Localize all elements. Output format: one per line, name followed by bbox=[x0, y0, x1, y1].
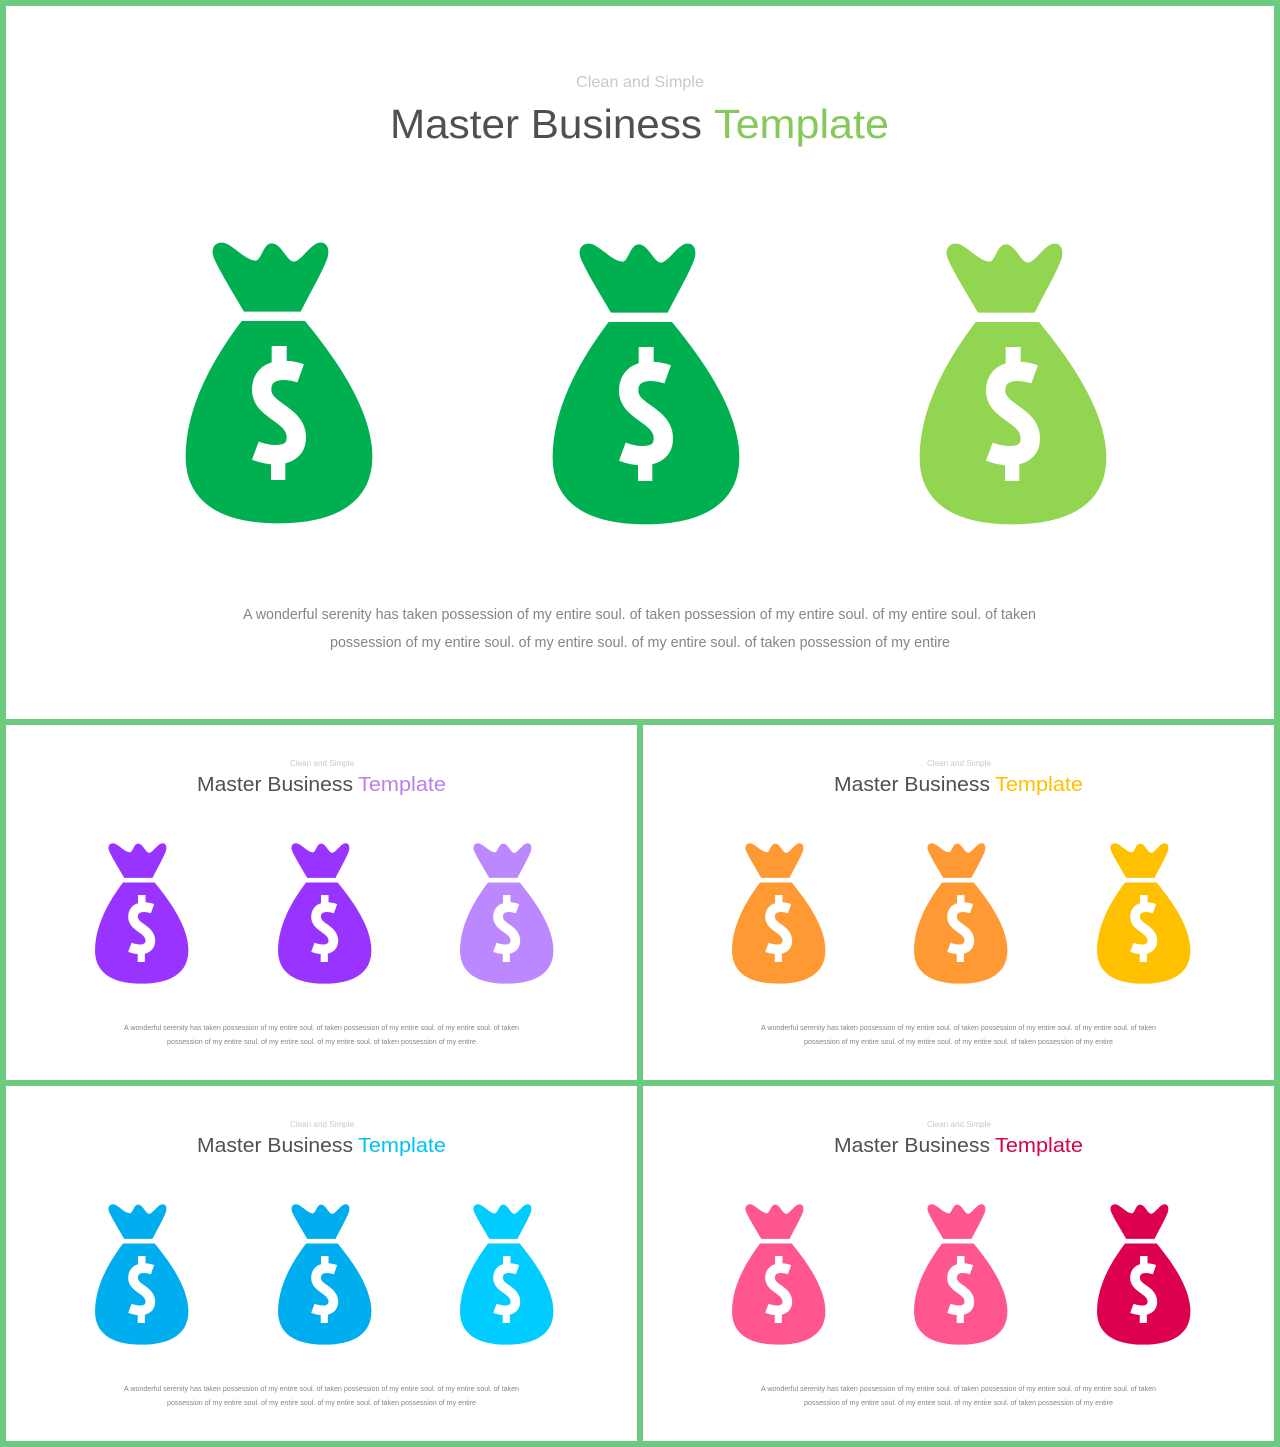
description text: A wonderful serenity has taken possession of my entire soul. of taken possession of my entire soul. of my entire soul. of taken bbox=[761, 1023, 1156, 1032]
title: Master Business bbox=[390, 101, 702, 147]
subtitle: Clean and Simple bbox=[927, 1120, 992, 1129]
title: Template bbox=[714, 101, 889, 147]
title: Template bbox=[358, 1134, 446, 1157]
title bbox=[834, 773, 1083, 796]
icon: money bag dark green bbox=[553, 244, 739, 524]
description text: possession of my entire soul. of my entire soul. of my entire soul. of taken possession of my entire bbox=[804, 1037, 1113, 1046]
icon: money bag dark green bbox=[186, 243, 372, 523]
description text bbox=[124, 1384, 519, 1407]
description text bbox=[761, 1023, 1156, 1046]
icon: money bag blue bbox=[278, 1204, 371, 1345]
description text: possession of my entire soul. of my entire soul. of my entire soul. of taken possession of my entire bbox=[167, 1398, 476, 1407]
panel: large green bbox=[6, 6, 1274, 719]
icon: money bag pink bbox=[732, 1204, 825, 1345]
description text: A wonderful serenity has taken possession of my entire soul. of taken possession of my entire soul. of my entire soul. of taken bbox=[243, 607, 1036, 623]
description text: possession of my entire soul. of my entire soul. of my entire soul. of taken possession of my entire bbox=[167, 1037, 476, 1046]
description text: possession of my entire soul. of my entire soul. of my entire soul. of taken possession of my entire bbox=[330, 635, 950, 651]
title: Template bbox=[995, 1134, 1083, 1157]
description text: A wonderful serenity has taken possession of my entire soul. of taken possession of my entire soul. of my entire soul. of taken bbox=[761, 1384, 1156, 1393]
description text bbox=[761, 1384, 1156, 1407]
title: Master Business bbox=[197, 1134, 353, 1157]
icon: money bag cyan bbox=[460, 1204, 553, 1345]
icon: money bag light green bbox=[920, 244, 1106, 524]
description text: A wonderful serenity has taken possession of my entire soul. of taken possession of my entire soul. of my entire soul. of taken bbox=[124, 1023, 519, 1032]
title bbox=[390, 101, 889, 147]
subtitle: Clean and Simple bbox=[290, 1120, 355, 1129]
panel: purple bbox=[6, 725, 637, 1080]
title: Template bbox=[995, 773, 1083, 796]
panel: pink bbox=[643, 1086, 1274, 1441]
subtitle: Clean and Simple bbox=[927, 759, 992, 768]
icon: money bag pink bbox=[914, 1204, 1007, 1345]
icon: money bag crimson bbox=[1097, 1204, 1190, 1345]
panel: orange bbox=[643, 725, 1274, 1080]
description text bbox=[243, 607, 1036, 651]
icon: money bag orange bbox=[914, 843, 1007, 984]
subtitle: Clean and Simple bbox=[290, 759, 355, 768]
title bbox=[834, 1134, 1083, 1157]
subtitle: Clean and Simple bbox=[576, 74, 704, 91]
description text: A wonderful serenity has taken possession of my entire soul. of taken possession of my entire soul. of my entire soul. of taken bbox=[124, 1384, 519, 1393]
title: Master Business bbox=[197, 773, 353, 796]
title bbox=[197, 1134, 446, 1157]
icon: money bag purple bbox=[278, 843, 371, 984]
title: Master Business bbox=[834, 1134, 990, 1157]
description text: possession of my entire soul. of my entire soul. of my entire soul. of taken possession of my entire bbox=[804, 1398, 1113, 1407]
panel: blue bbox=[6, 1086, 637, 1441]
icon: money bag blue bbox=[95, 1204, 188, 1345]
title bbox=[197, 773, 446, 796]
title: Master Business bbox=[834, 773, 990, 796]
icon: money bag yellow bbox=[1097, 843, 1190, 984]
description text bbox=[124, 1023, 519, 1046]
icon: money bag orange bbox=[732, 843, 825, 984]
icon: money bag light purple bbox=[460, 843, 553, 984]
icon: money bag purple bbox=[95, 843, 188, 984]
title: Template bbox=[358, 773, 446, 796]
